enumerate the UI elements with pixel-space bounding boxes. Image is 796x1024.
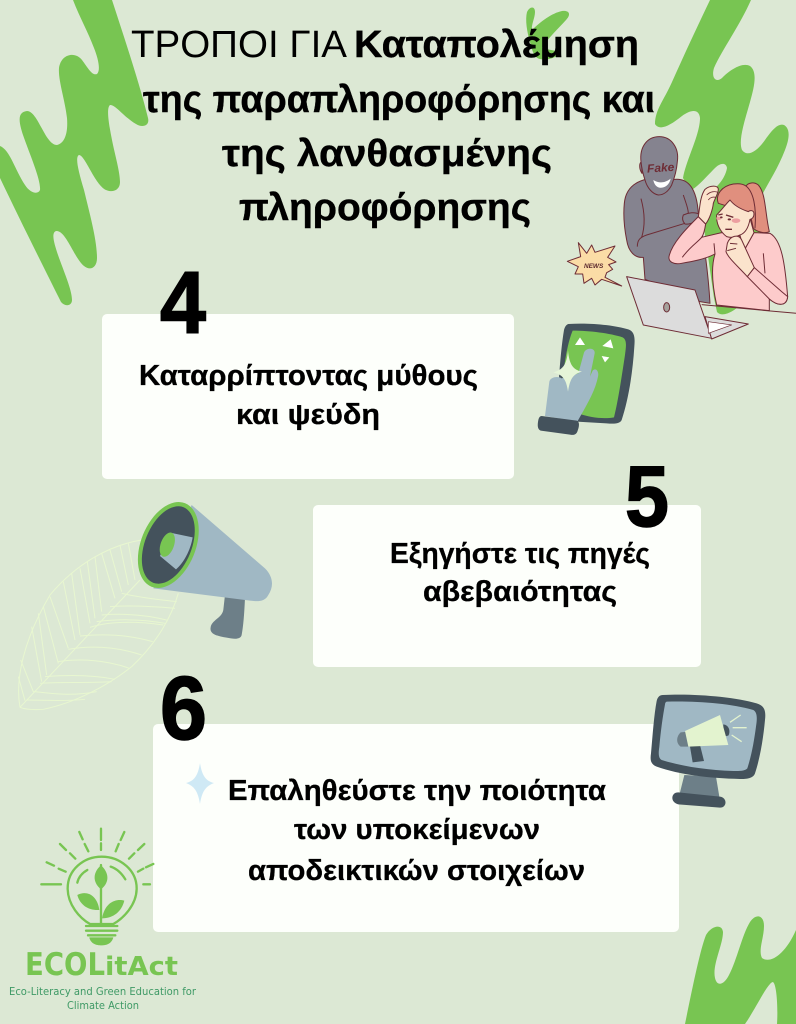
icon: light bulb with plant: [41, 829, 153, 945]
card 4: [102, 314, 514, 479]
card 6: των υποκείμενων: [294, 814, 540, 846]
laptop: [627, 277, 748, 339]
illustration: fake news man and worried woman at laptop: [567, 137, 796, 339]
green blob: small top accent: [526, 8, 569, 59]
card 5: αβεβαιότητας: [423, 576, 617, 608]
logo wordmark: ECOLitAct: [25, 947, 178, 983]
icon: blue sparkle: [186, 763, 214, 804]
card 4: και ψεύδη: [236, 399, 380, 431]
leaf outline decoration: [18, 540, 178, 710]
title: της παραπληροφόρησης και: [143, 79, 655, 121]
number 5: 5: [625, 449, 669, 545]
card 6: Επαληθεύστε την ποιότητα: [228, 775, 606, 807]
hooded man: [624, 137, 710, 303]
icon: megaphone: [126, 493, 272, 639]
card 4: Καταρρίπτοντας μύθους: [139, 360, 478, 392]
green blob: top right: [655, 0, 789, 314]
icon: tablet with tapping hand: [538, 324, 635, 435]
news burst icon: [567, 243, 622, 286]
title: [131, 24, 655, 229]
card 6: [153, 724, 679, 932]
green blob: bottom right: [685, 916, 796, 1024]
card 5: Εξηγήστε τις πηγές: [390, 538, 650, 570]
title: της λανθασμένης: [222, 133, 552, 175]
green blob: top left: [0, 0, 148, 305]
logo: ECOLitAct: [9, 829, 196, 1012]
icon: monitor with megaphone: [651, 695, 765, 808]
number 6: 6: [160, 659, 207, 759]
woman: [669, 183, 796, 313]
title: ΤΡΟΠΟΙ ΓΙΑ: [131, 24, 348, 66]
card 5: [313, 505, 701, 667]
number 4: 4: [160, 253, 206, 352]
title: πληροφόρησης: [239, 187, 531, 229]
title: Καταπολέμηση: [354, 24, 639, 66]
logo tagline: Eco-Literacy and Green Education for: [9, 985, 196, 998]
hooded man: Fake: [647, 161, 675, 176]
desk line: [702, 305, 796, 313]
logo: ECOLitAct: Climate Action: [67, 999, 139, 1012]
card 6: αποδεικτικών στοιχείων: [248, 855, 585, 887]
news burst icon: NEWS: [584, 263, 604, 270]
